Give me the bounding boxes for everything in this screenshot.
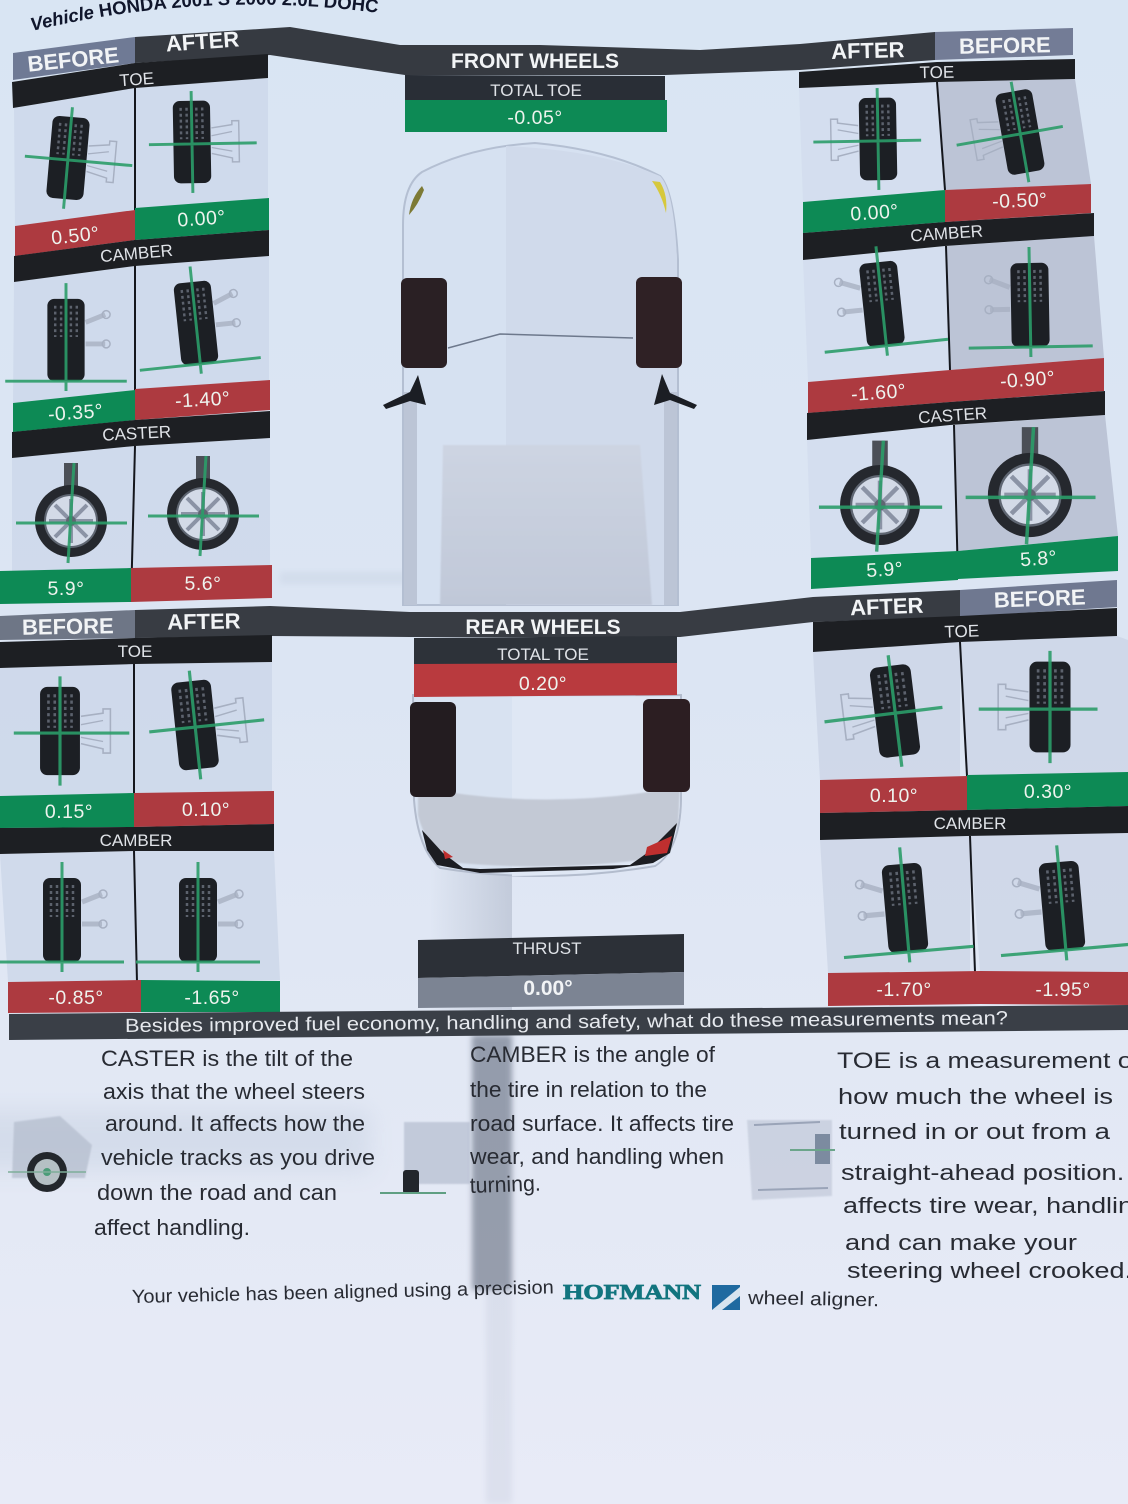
toe after tire bbox=[143, 663, 270, 784]
toe before tire bbox=[14, 676, 129, 786]
camber before number: -0.35° bbox=[47, 400, 104, 426]
icon: toe car bbox=[747, 1120, 835, 1200]
camber after tire bbox=[136, 862, 260, 972]
gauge cells bbox=[0, 662, 280, 982]
camber after value bbox=[141, 980, 280, 1012]
panel: thrust bbox=[418, 934, 684, 1008]
toe after number: 0.00° bbox=[850, 200, 899, 226]
column divider bbox=[960, 642, 975, 972]
caster explanation: affect handling. bbox=[94, 1215, 250, 1240]
windshield area bbox=[440, 445, 652, 605]
toe explanation: and can make your bbox=[845, 1230, 1077, 1255]
panel: front total toe bbox=[405, 75, 667, 132]
panel: rear wheels header bbox=[0, 580, 1117, 640]
caster before value bbox=[958, 536, 1118, 579]
icon: camber car bbox=[380, 1122, 470, 1194]
camber explanation bbox=[469, 1042, 734, 1198]
toe before value bbox=[15, 210, 135, 256]
panel: front right wheel bbox=[799, 59, 1118, 589]
total toe bar bbox=[405, 75, 665, 101]
camber before value bbox=[8, 980, 141, 1013]
camber before number: -0.90° bbox=[999, 367, 1056, 393]
caster label: CASTER bbox=[102, 422, 172, 445]
car body front bbox=[403, 143, 678, 605]
camber after value bbox=[828, 971, 980, 1006]
logo: Hofmann wordmark: HOFMANN bbox=[563, 1280, 701, 1304]
toe before number: 0.30° bbox=[1024, 781, 1072, 803]
camber label: CAMBER bbox=[100, 831, 172, 850]
caster before wheel bbox=[966, 427, 1096, 544]
body right half tint bbox=[506, 146, 677, 605]
after label left: AFTER bbox=[167, 608, 241, 635]
toe before value bbox=[0, 793, 134, 828]
caster before number: 5.8° bbox=[1019, 547, 1058, 571]
caster after wheel bbox=[148, 456, 259, 556]
panel: rear left wheel bbox=[0, 635, 280, 1013]
thrust label: THRUST bbox=[513, 939, 581, 958]
thrust bar bbox=[418, 934, 684, 978]
footer end text: wheel aligner. bbox=[747, 1288, 879, 1311]
toe before tire bbox=[979, 651, 1098, 763]
toe header bbox=[12, 54, 268, 108]
toe header bbox=[813, 608, 1117, 652]
camber before number: -1.95° bbox=[1035, 979, 1091, 1001]
mirror left bbox=[383, 375, 426, 409]
before label left: BEFORE bbox=[26, 42, 120, 77]
car illustration bbox=[383, 143, 697, 876]
caster before wheel bbox=[16, 463, 127, 563]
camber after tire bbox=[814, 240, 949, 362]
caster explanation: vehicle tracks as you drive bbox=[101, 1145, 375, 1170]
before label left: BEFORE bbox=[22, 613, 114, 640]
before label right: BEFORE bbox=[993, 584, 1086, 613]
toe label: TOE bbox=[944, 621, 979, 642]
headlight left bbox=[409, 186, 424, 215]
front header band bbox=[135, 27, 935, 75]
caster before number: 5.9° bbox=[48, 578, 84, 600]
before label right: BEFORE bbox=[959, 32, 1051, 59]
camber after value bbox=[135, 380, 270, 420]
after label right: AFTER bbox=[850, 593, 924, 620]
left before tab bbox=[0, 610, 135, 640]
caster explanation: down the road and can bbox=[97, 1180, 337, 1205]
rear bumper and tail lights bbox=[422, 823, 677, 873]
camber header bbox=[14, 230, 269, 282]
rear wheels title: REAR WHEELS bbox=[465, 616, 621, 639]
toe explanation: how much the wheel is bbox=[838, 1084, 1113, 1109]
banner text: Besides improved fuel economy, handling and safety, what do these measurements mean? bbox=[125, 1008, 1008, 1037]
logo: Hofmann square bbox=[712, 1285, 740, 1310]
toe explanation: steering wheel crooked. bbox=[847, 1258, 1128, 1283]
toe after number: 0.10° bbox=[182, 799, 230, 821]
total toe label: TOTAL TOE bbox=[490, 81, 582, 100]
camber before tire bbox=[967, 246, 1093, 358]
toe before tire bbox=[21, 103, 137, 214]
column divider bbox=[131, 88, 135, 602]
camber explanation: the tire in relation to the bbox=[470, 1077, 707, 1102]
camber header bbox=[803, 213, 1094, 260]
total toe label: TOTAL TOE bbox=[497, 645, 589, 664]
toe after tire bbox=[817, 649, 949, 775]
camber explanation: turning. bbox=[469, 1171, 541, 1198]
camber before tire bbox=[992, 840, 1128, 966]
banner bar bbox=[9, 1005, 1128, 1040]
camber before value bbox=[13, 390, 135, 432]
gauge cells bbox=[813, 636, 1128, 973]
footer sentence: Your vehicle has been aligned using a precision bbox=[132, 1277, 554, 1308]
toe before number: 0.15° bbox=[45, 801, 93, 823]
toe after number: 0.00° bbox=[177, 206, 226, 232]
camber explanation: CAMBER is the angle of bbox=[470, 1042, 716, 1067]
caster after value bbox=[131, 565, 272, 602]
right before tab bbox=[935, 28, 1073, 60]
after label right: AFTER bbox=[831, 37, 905, 64]
camber after tire bbox=[835, 842, 975, 968]
light cells bbox=[799, 82, 958, 558]
side pillars bbox=[404, 392, 677, 605]
caster after number: 5.6° bbox=[185, 573, 221, 595]
rear wheel left bbox=[410, 702, 456, 797]
camber after tire bbox=[130, 260, 262, 380]
gauge cells bbox=[12, 78, 270, 571]
camber before tire bbox=[5, 283, 127, 391]
camber header bbox=[0, 824, 274, 854]
toe before value bbox=[967, 772, 1128, 810]
caster before value bbox=[0, 568, 131, 604]
toe label: TOE bbox=[119, 69, 155, 90]
thrust value bar bbox=[418, 972, 684, 1008]
toe explanation bbox=[837, 1048, 1128, 1283]
toe after value bbox=[135, 198, 269, 240]
caster after value bbox=[811, 551, 958, 589]
toe after number: 0.10° bbox=[870, 785, 918, 807]
camber after value bbox=[808, 370, 950, 413]
total toe number: -0.05° bbox=[507, 107, 563, 129]
after label left: AFTER bbox=[165, 26, 240, 57]
toe explanation: straight-ahead position. It bbox=[841, 1160, 1128, 1185]
toe after tire bbox=[148, 90, 258, 194]
camber after number: -1.70° bbox=[876, 979, 932, 1001]
caster header bbox=[12, 411, 270, 458]
toe after value bbox=[803, 190, 945, 233]
camber label: CAMBER bbox=[910, 221, 984, 246]
caster explanation: axis that the wheel steers bbox=[103, 1079, 365, 1104]
toe explanation: affects tire wear, handling bbox=[843, 1193, 1128, 1218]
toe before tire bbox=[947, 74, 1071, 193]
camber explanation: road surface. It affects tire bbox=[470, 1111, 734, 1136]
toe explanation: turned in or out from a bbox=[839, 1119, 1111, 1144]
toe label: TOE bbox=[118, 642, 152, 661]
camber explanation: wear, and handling when bbox=[469, 1144, 724, 1169]
left before tab bbox=[13, 37, 135, 80]
camber header bbox=[820, 806, 1128, 840]
camber before number: -0.85° bbox=[48, 987, 104, 1009]
thrust number: 0.00° bbox=[523, 977, 573, 1000]
hood crease bbox=[448, 334, 633, 348]
panel: front wheels header bbox=[13, 26, 1073, 80]
caster explanation: CASTER is the tilt of the bbox=[101, 1046, 353, 1071]
toe label: TOE bbox=[919, 63, 954, 82]
camber before value bbox=[950, 358, 1104, 402]
caster label: CASTER bbox=[918, 404, 988, 427]
total toe number: 0.20° bbox=[519, 673, 567, 695]
camber after number: -1.60° bbox=[850, 380, 907, 406]
icon: caster car bbox=[8, 1116, 92, 1192]
toe before number: -0.50° bbox=[992, 189, 1048, 213]
total toe value bbox=[405, 100, 667, 132]
rear header band bbox=[135, 590, 960, 638]
grey cells bbox=[938, 79, 1118, 551]
toe before value bbox=[945, 184, 1091, 222]
front wheels title: FRONT WHEELS bbox=[451, 50, 619, 73]
total toe value bbox=[414, 663, 677, 697]
front wheel left bbox=[401, 278, 447, 368]
toe after tire bbox=[812, 87, 922, 191]
rear window bbox=[418, 787, 680, 867]
panel: rear right wheel bbox=[813, 608, 1128, 1006]
caster explanation: around. It affects how the bbox=[105, 1111, 365, 1136]
toe header bbox=[0, 635, 272, 668]
caster header bbox=[807, 391, 1105, 440]
mirror right bbox=[654, 374, 697, 409]
caster after wheel bbox=[819, 441, 942, 552]
camber after number: -1.65° bbox=[184, 987, 240, 1009]
total toe bar bbox=[414, 636, 677, 665]
column divider bbox=[937, 82, 958, 579]
camber after number: -1.40° bbox=[175, 388, 231, 412]
camber label: CAMBER bbox=[934, 814, 1006, 833]
panel: rear total toe bbox=[414, 636, 677, 697]
toe after value bbox=[820, 776, 967, 813]
toe explanation: TOE is a measurement of bbox=[837, 1048, 1128, 1073]
headlight right bbox=[652, 181, 666, 213]
right before tab bbox=[960, 580, 1117, 617]
toe header bbox=[799, 59, 1075, 88]
caster explanation bbox=[94, 1046, 375, 1240]
front wheel right bbox=[636, 277, 682, 368]
caster after number: 5.9° bbox=[866, 558, 904, 582]
panel: front left wheel bbox=[0, 54, 272, 604]
toe after value bbox=[134, 791, 274, 827]
camber before tire bbox=[0, 862, 124, 972]
rear wheel right bbox=[643, 699, 690, 792]
camber label: CAMBER bbox=[99, 241, 174, 266]
toe before number: 0.50° bbox=[50, 223, 101, 249]
rear body right tint bbox=[512, 697, 680, 876]
column divider bbox=[134, 664, 137, 982]
car body rear bbox=[413, 695, 681, 876]
camber before value bbox=[980, 971, 1128, 1005]
explanation banner bbox=[9, 1005, 1128, 1040]
